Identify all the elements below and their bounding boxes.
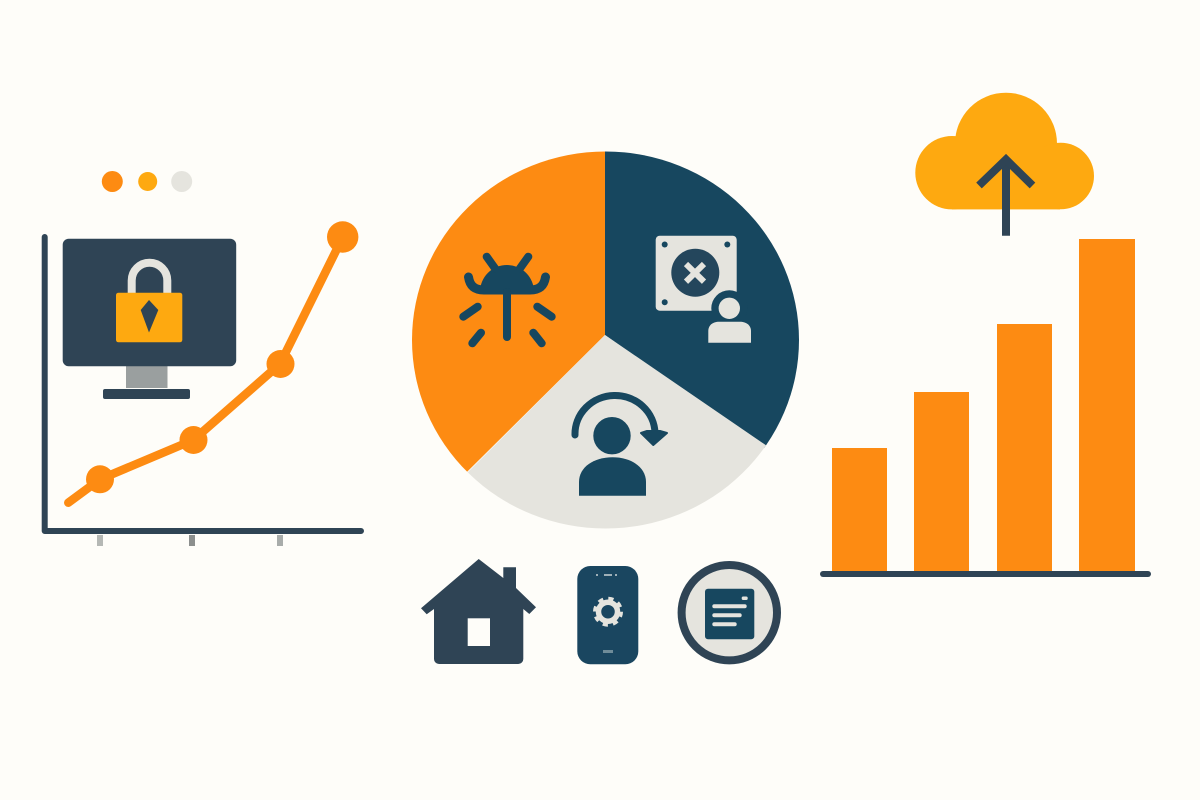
- icon: cloud upload: [915, 93, 1094, 236]
- icon: document badge: [682, 565, 777, 660]
- chart axes: [45, 237, 361, 531]
- three status dots: [102, 171, 192, 192]
- pie slice: navy: [605, 152, 799, 448]
- upload arrow: [979, 160, 1032, 236]
- icon: phone with gear: [577, 566, 638, 664]
- line chart panel: [45, 221, 361, 546]
- icon: monitor with padlock: [63, 239, 236, 399]
- icon: house: [421, 559, 536, 664]
- pie slice: orange: [412, 152, 605, 472]
- icon: user with refresh arrow: [575, 395, 667, 496]
- axis ticks: [97, 535, 283, 546]
- icon: disk error with user: [656, 236, 751, 343]
- icon: bug: [463, 257, 552, 343]
- bar chart: [820, 239, 1151, 577]
- pie slice: light grey: [468, 335, 766, 528]
- gear: [595, 599, 621, 625]
- cloud: [915, 93, 1094, 209]
- trend line with markers: [68, 221, 358, 503]
- icon: padlock: [116, 263, 182, 342]
- pie chart: [412, 152, 799, 528]
